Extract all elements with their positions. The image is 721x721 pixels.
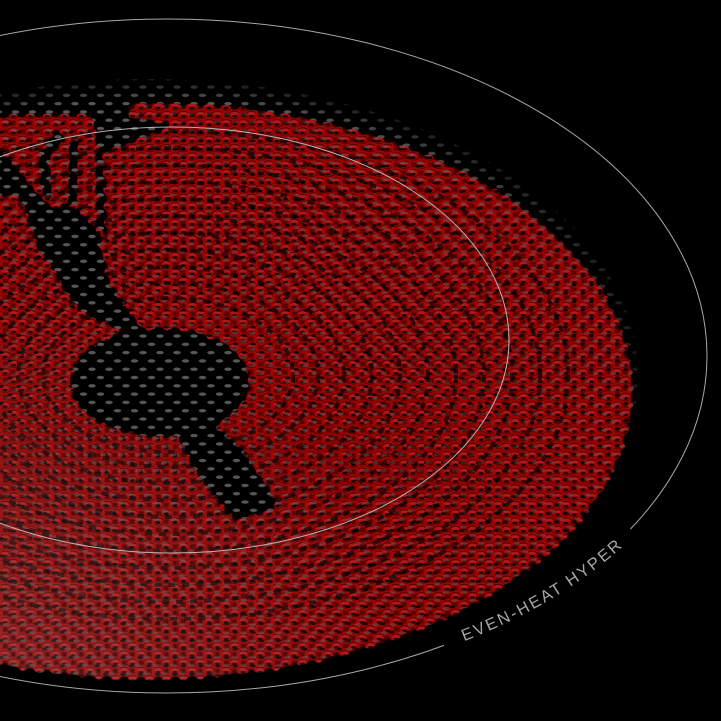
grey dot grid of the cooktop glass [0, 79, 638, 519]
concentric coil rings [0, 131, 568, 619]
red glowing heating element [0, 103, 634, 681]
dark moire spots [0, 105, 629, 676]
inner zone ring [0, 127, 509, 553]
label: EVEN-HEAT HYPER: EVEN-HEAT HYPER [461, 540, 622, 641]
lighter reflection at lower left [0, 377, 313, 680]
grey dots showing through the red [0, 104, 634, 675]
